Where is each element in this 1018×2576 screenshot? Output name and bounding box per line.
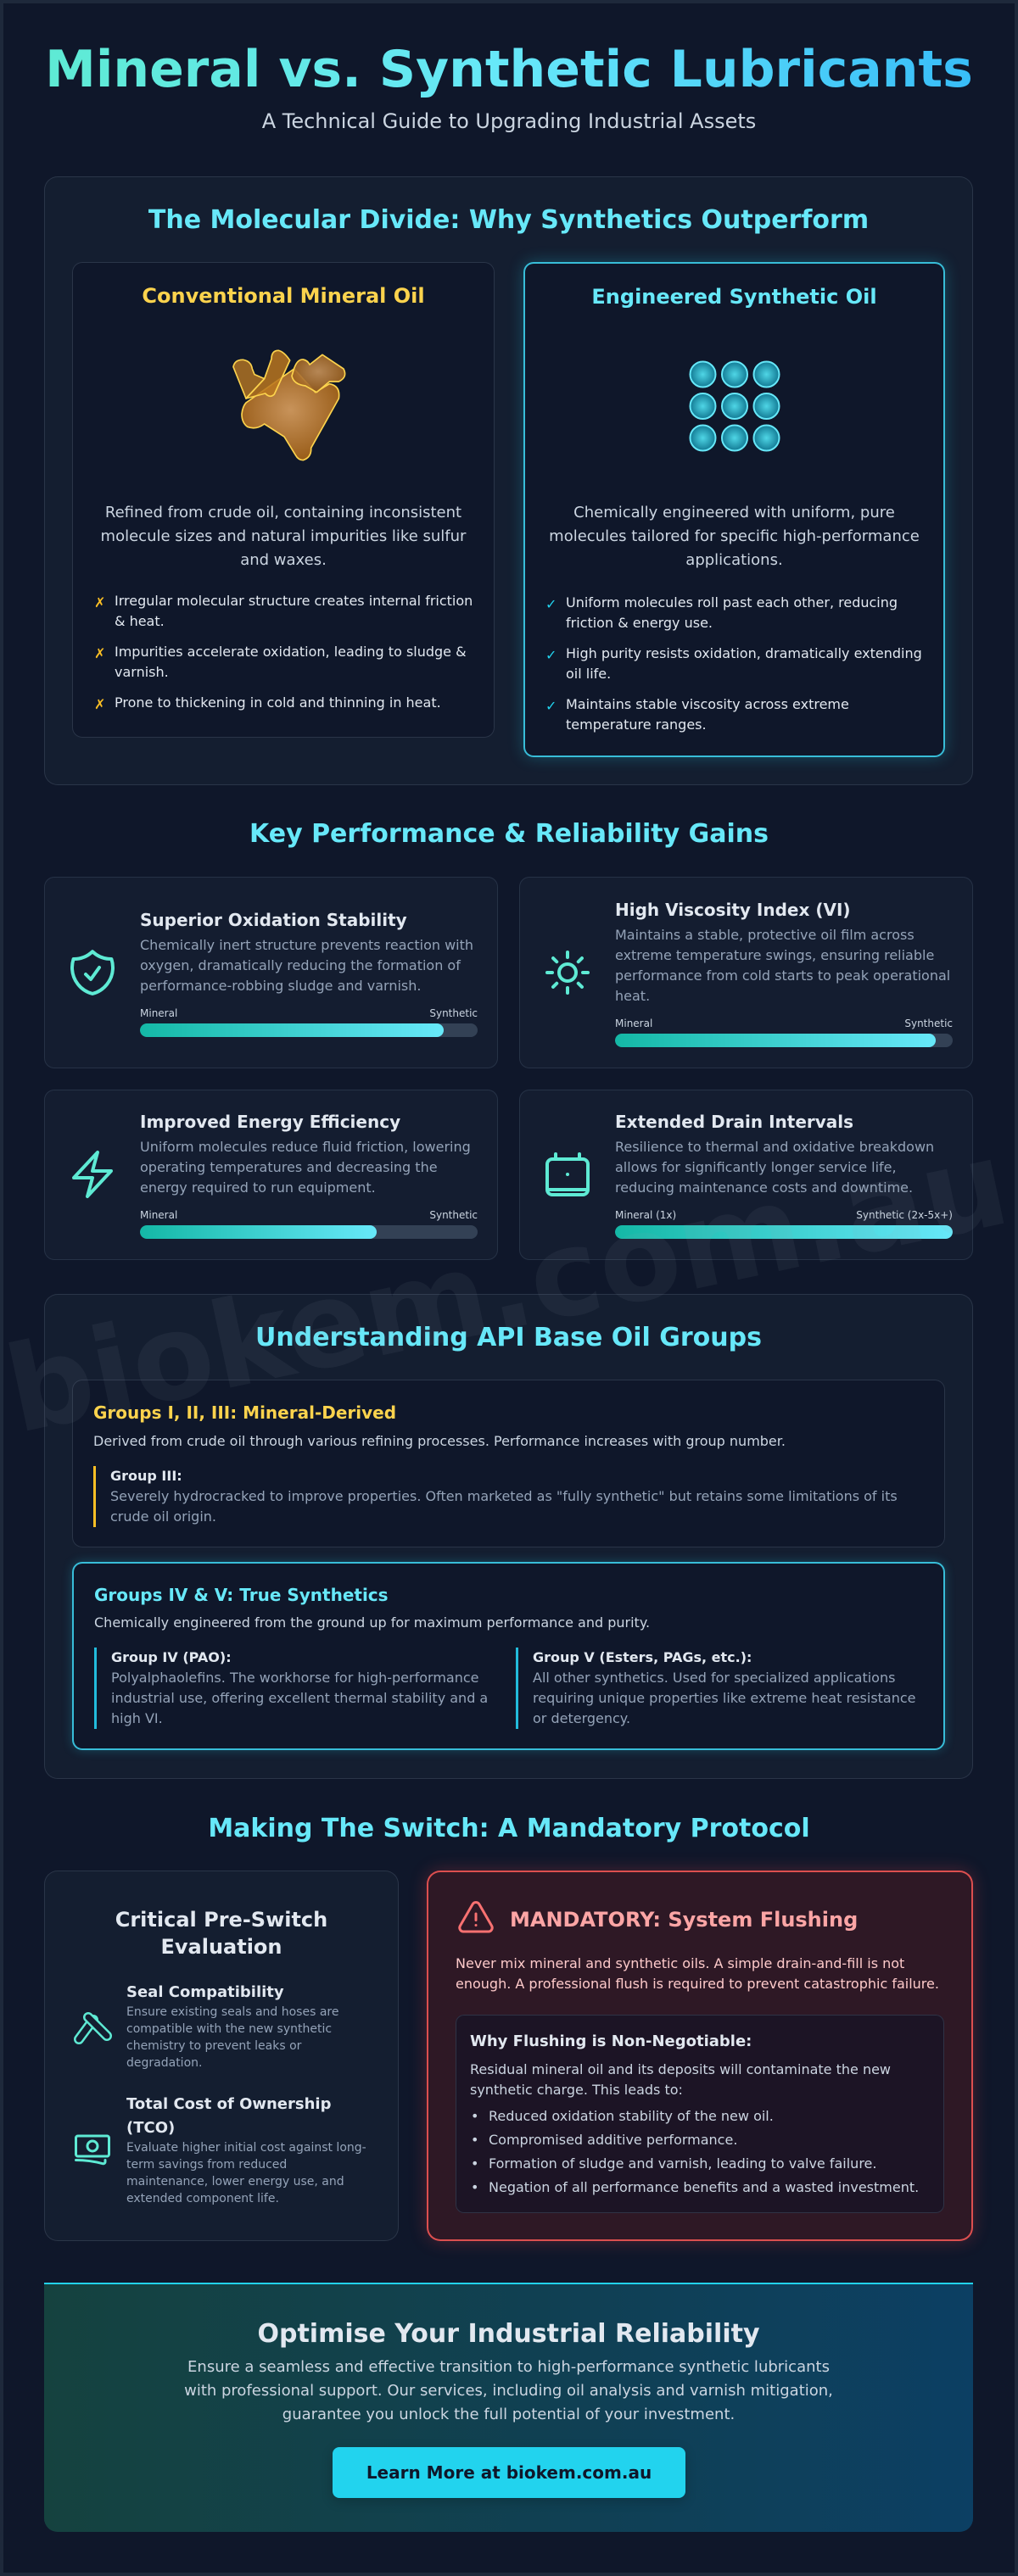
heading: molecular divide: The Molecular Divide: Why Synthetics Outperform	[148, 205, 869, 234]
panel: conventional mineral oil	[72, 262, 495, 738]
text: viscosity: extreme temperature swings, ensuring reliable	[615, 947, 934, 963]
list item: impurities	[94, 644, 467, 680]
card: groups I II III	[72, 1380, 945, 1547]
text: seal compatibility: chemistry to prevent leaks or	[126, 2039, 301, 2053]
callout: group IV: industrial use, offering excellent thermal stability and a	[111, 1690, 488, 1706]
title: mineral derived: Groups I, II, III: Mineral-Derived	[93, 1402, 396, 1423]
title: Mineral vs. Synthetic Lubricants	[45, 40, 973, 99]
list item: impurities: Impurities accelerate oxidation, leading to sludge &	[115, 644, 467, 660]
text: total cost of ownership	[126, 2141, 366, 2205]
heading: pre-switch: Critical Pre-Switch	[115, 1908, 327, 1932]
heading: making the switch: Making The Switch: A Mandatory Protocol	[208, 1813, 810, 1843]
label: synthetic: Synthetic	[904, 1018, 953, 1029]
list item: uniform molecules: friction & energy use.	[566, 615, 713, 631]
list item: irregular structure: ✗	[94, 594, 105, 611]
text: energy: Uniform molecules reduce fluid friction, lowering	[140, 1139, 471, 1155]
bar: viscosity 95%	[615, 1034, 953, 1047]
list item: high purity: High purity resists oxidation, dramatically extending	[566, 645, 922, 661]
heading: optimise: Optimise Your Industrial Reliability	[257, 2318, 760, 2349]
panel: pre-switch evaluation	[44, 1871, 399, 2241]
card: energy efficiency	[44, 1090, 498, 1260]
text: energy	[140, 1139, 471, 1196]
card: viscosity index	[519, 877, 973, 1068]
callout: group III: Severely hydrocracked to improve properties. Often marketed as "fully synthetic" but retains some limitations of its	[110, 1487, 898, 1504]
callout: group IV: high VI.	[111, 1710, 163, 1726]
text: mineral description: molecule sizes and natural impurities like sulfur	[101, 527, 466, 545]
icon: banknote	[75, 2135, 110, 2166]
text: mandatory: enough. A professional flush is required to prevent catastrophic failure.	[456, 1976, 939, 1992]
text: why flushing	[470, 2061, 891, 2098]
text: mineral description: Refined from crude oil, containing inconsistent	[105, 504, 461, 521]
title: oxidation: Superior Oxidation Stability	[140, 910, 407, 930]
text: total cost of ownership: maintenance, lower energy use, and	[126, 2175, 344, 2188]
heading: pre-switch	[115, 1908, 327, 1959]
card: drain intervals	[519, 1090, 973, 1260]
list item: high purity: oil life.	[566, 666, 611, 682]
text: oxidation: oxygen, dramatically reducing the formation of	[140, 957, 461, 973]
list item: uniform molecules: Uniform molecules roll past each other, reducing	[566, 594, 898, 611]
text: oxidation	[140, 937, 473, 994]
text: mandatory: Never mix mineral and synthetic oils. A simple drain-and-fill is not	[456, 1955, 904, 1971]
icon: shield	[70, 950, 115, 995]
text: total cost of ownership: Evaluate higher initial cost against long-	[126, 2141, 366, 2155]
text: oxidation: performance-robbing sludge and varnish.	[140, 978, 421, 994]
list: consequences: Negation of all performance benefits and a wasted investment.	[489, 2179, 919, 2195]
text: seal compatibility: compatible with the new synthetic	[126, 2022, 332, 2036]
icon: uniform synthetic molecules	[689, 361, 780, 451]
icon: warning triangle	[458, 1901, 494, 1933]
callout: group V	[516, 1648, 923, 1729]
list item: high purity: ✓	[545, 647, 557, 663]
callout: group III: Group III:	[110, 1467, 182, 1484]
text: why flushing: Residual mineral oil and its deposits will contaminate the new	[470, 2061, 891, 2077]
text: drain: reducing maintenance costs and downtime.	[615, 1179, 913, 1196]
callout: group III: crude oil origin.	[110, 1508, 216, 1525]
text: synthetic description	[549, 504, 920, 569]
text: mineral description	[101, 504, 467, 569]
text: mineral description: and waxes.	[240, 551, 327, 569]
callout: group V: or detergency.	[533, 1710, 630, 1726]
callout: group IV: Group IV (PAO):	[111, 1649, 232, 1665]
list: consequences	[489, 2108, 919, 2195]
list item: irregular structure: & heat.	[115, 613, 165, 629]
bullets: •	[471, 2179, 478, 2195]
title: seal compatibility: Seal Compatibility	[126, 1983, 284, 2001]
text: oxidation: Chemically inert structure prevents reaction with	[140, 937, 473, 953]
title: true synthetics: Groups IV & V: True Synthetics	[94, 1585, 389, 1605]
list item: high purity	[545, 645, 922, 682]
title: energy: Improved Energy Efficiency	[140, 1112, 400, 1132]
label: mineral: Mineral	[140, 1209, 177, 1221]
panel: API base oil groups	[44, 1294, 973, 1779]
text: drain: allows for significantly longer service life,	[615, 1159, 897, 1175]
heading: mineral oil: Conventional Mineral Oil	[142, 284, 425, 308]
list item: stable viscosity	[545, 696, 849, 733]
callout: group IV	[94, 1648, 493, 1729]
heading: mandatory: MANDATORY: System Flushing	[510, 1908, 858, 1932]
text: seal compatibility: Ensure existing seals and hoses are	[126, 2005, 338, 2019]
icon: calendar	[545, 1152, 590, 1196]
list item: stable viscosity: ✓	[545, 698, 557, 714]
list item: thickening: Prone to thickening in cold and thinning in heat.	[115, 694, 441, 711]
bar: drain 100%	[615, 1225, 953, 1239]
callout: group V: All other synthetics. Used for specialized applications	[533, 1670, 895, 1686]
label: synthetic: Synthetic	[429, 1007, 478, 1019]
title: viscosity: High Viscosity Index (VI)	[615, 900, 851, 920]
icon: bolt	[72, 1150, 113, 1199]
callout: group V: Group V (Esters, PAGs, etc.):	[533, 1649, 752, 1665]
heading: key performance: Key Performance & Reliability Gains	[249, 819, 769, 849]
list: consequences: Formation of sludge and varnish, leading to valve failure.	[489, 2155, 876, 2172]
title: drain: Extended Drain Intervals	[615, 1112, 853, 1132]
list item: irregular structure	[94, 593, 473, 629]
card: groups IV and V	[72, 1562, 945, 1750]
label: mineral: Mineral	[615, 1018, 652, 1029]
text: energy: energy required to run equipment.	[140, 1179, 376, 1196]
text: optimise: guarantee you unlock the full potential of your investment.	[282, 2406, 735, 2423]
panel: the molecular divide	[44, 176, 973, 785]
text: synthetic description: Chemically engineered with uniform, pure	[573, 504, 895, 521]
list item: uniform molecules	[545, 594, 898, 631]
text: mandatory	[456, 1955, 939, 1992]
list item: stable viscosity: Maintains stable viscosity across extreme	[566, 696, 849, 712]
panel: engineered synthetic oil	[523, 262, 945, 757]
text: viscosity: heat.	[615, 988, 650, 1004]
text: optimise: Ensure a seamless and effective transition to high-performance synthetic lubricants	[187, 2358, 830, 2376]
text: seal compatibility	[126, 2005, 338, 2070]
text: energy: operating temperatures and decreasing the	[140, 1159, 438, 1175]
bullets	[471, 2108, 478, 2195]
title: total cost of ownership: (TCO)	[126, 2118, 175, 2137]
label: synthetic: Synthetic	[429, 1209, 478, 1221]
watermark: biokem.com.au	[0, 1114, 1018, 1461]
text: why flushing: synthetic charge. This leads to:	[470, 2082, 683, 2098]
button: learn more: Learn More at biokem.com.au	[366, 2462, 652, 2483]
label: synthetic 2x-5x: Synthetic (2x-5x+)	[856, 1209, 953, 1221]
bar: energy 70%	[140, 1225, 478, 1239]
bar: oxidation 90%	[140, 1023, 478, 1037]
text: seal compatibility: degradation.	[126, 2056, 202, 2070]
icon: irregular mineral molecules	[232, 349, 346, 461]
panel: call to action	[44, 2283, 973, 2532]
title: total cost of ownership: Total Cost of Ownership	[126, 2095, 331, 2113]
text: drain	[615, 1139, 934, 1196]
callout: group III	[93, 1465, 908, 1526]
list: consequences: Compromised additive performance.	[489, 2132, 737, 2148]
text: total cost of ownership: extended component life.	[126, 2192, 279, 2205]
label: mineral: Mineral	[140, 1007, 177, 1019]
card: oxidation stability	[44, 877, 498, 1068]
text: viscosity: performance from cold starts to peak operational	[615, 967, 950, 984]
button: learn more	[333, 2447, 685, 2498]
list item: irregular structure: Irregular molecular structure creates internal friction	[115, 593, 473, 609]
list item: stable viscosity: temperature ranges.	[566, 716, 707, 733]
list item: uniform molecules: ✓	[545, 596, 557, 612]
text: viscosity: Maintains a stable, protective oil film across	[615, 927, 915, 943]
text: synthetic description: molecules tailored for specific high-performance	[549, 527, 920, 545]
list item: impurities: ✗	[94, 645, 105, 661]
bullets: •	[471, 2155, 478, 2172]
title: why flushing: Why Flushing is Non-Negotiable:	[470, 2032, 752, 2050]
panel: mandatory flushing	[427, 1871, 973, 2241]
text: drain: Resilience to thermal and oxidative breakdown	[615, 1139, 934, 1155]
callout: group V: requiring unique properties like extreme heat resistance	[533, 1690, 916, 1706]
bullets: •	[471, 2108, 478, 2124]
text: true synthetics: Chemically engineered from the ground up for maximum performance and purity.	[94, 1614, 650, 1631]
subtitle: A Technical Guide to Upgrading Industrial Assets	[262, 109, 756, 133]
title: total cost of ownership	[126, 2095, 331, 2137]
text: optimise: with professional support. Our services, including oil analysis and varnish mitigation,	[184, 2382, 833, 2400]
heading: synthetic oil: Engineered Synthetic Oil	[591, 285, 877, 309]
text: viscosity	[615, 927, 950, 1004]
text: optimise	[184, 2358, 833, 2423]
text: mineral derived: Derived from crude oil through various refining processes. Performance increases with group number.	[93, 1433, 786, 1448]
text: total cost of ownership: term savings from reduced	[126, 2158, 287, 2172]
list item: impurities: varnish.	[115, 664, 169, 680]
icon: seal pills	[74, 2012, 112, 2044]
label: mineral 1x: Mineral (1x)	[615, 1209, 676, 1221]
panel: why flushing	[456, 2015, 944, 2213]
text: synthetic description: applications.	[685, 551, 783, 569]
bullets: •	[471, 2132, 478, 2148]
icon: sun	[545, 951, 590, 995]
list: consequences: Reduced oxidation stability of the new oil.	[489, 2108, 774, 2124]
callout: group IV: Polyalphaolefins. The workhorse for high-performance	[111, 1670, 478, 1686]
heading: pre-switch: Evaluation	[160, 1935, 282, 1959]
list item: thickening: ✗	[94, 696, 105, 712]
heading: API groups: Understanding API Base Oil Groups	[255, 1323, 762, 1352]
